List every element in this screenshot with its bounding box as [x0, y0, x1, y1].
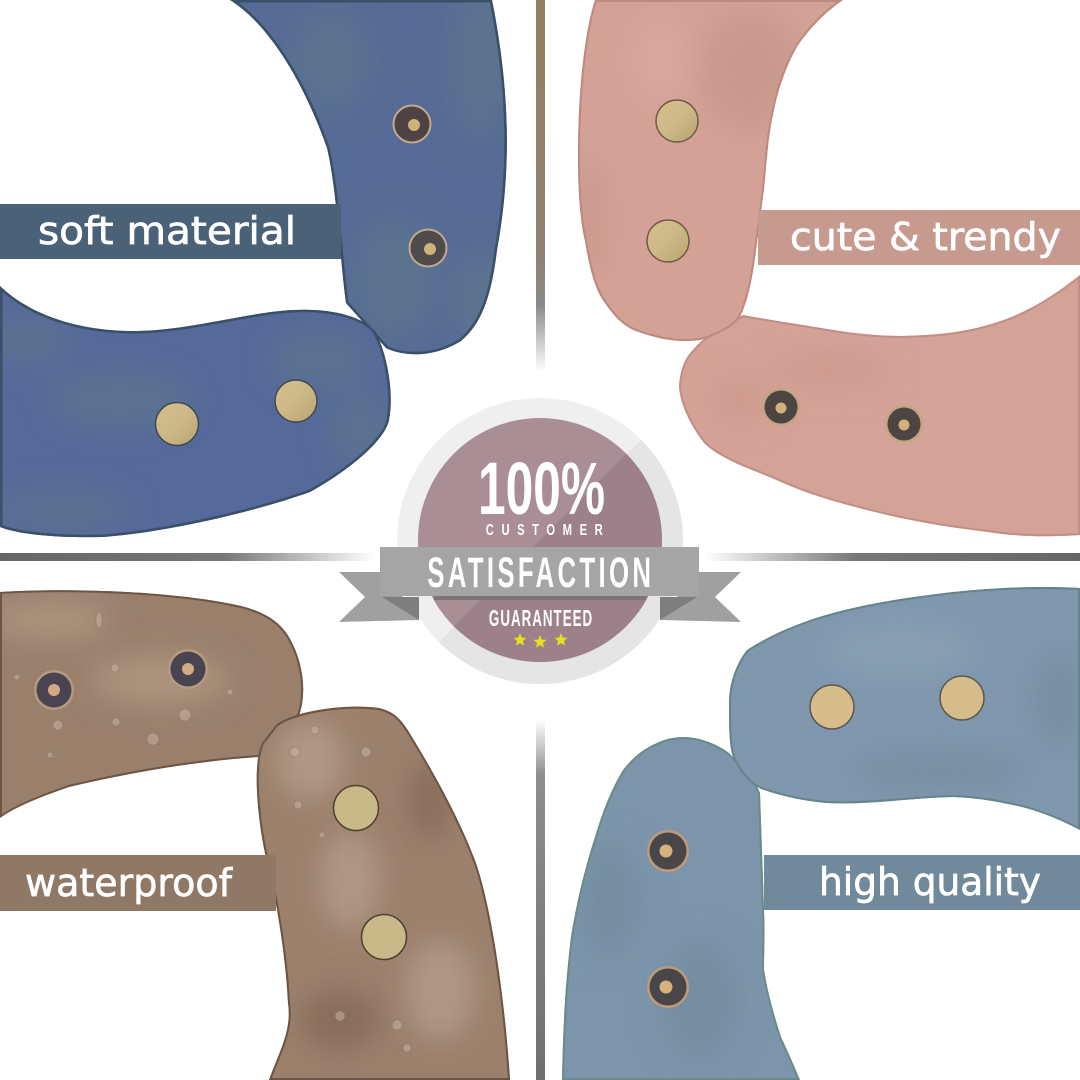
- snap: socket: [392, 104, 432, 144]
- text: satisfaction: SATISFACTION: [427, 548, 651, 597]
- label text: cute & trendy: [790, 215, 1061, 259]
- snap: socket: [762, 388, 800, 426]
- water droplets: [14, 612, 411, 1052]
- pink bib upper strap: [570, 0, 850, 345]
- badge: 100% customer satisfaction: [339, 398, 741, 684]
- pink bib lower strap: [675, 270, 1080, 540]
- snap: brass: [275, 380, 317, 422]
- steel bib upper strap: [725, 580, 1080, 835]
- panel: soft material: [0, 0, 520, 540]
- snap: socket: [168, 649, 208, 689]
- text: guaranteed: GUARANTEED: [489, 605, 592, 631]
- badge inner disc: [418, 418, 662, 662]
- brown bib right strap: [250, 700, 515, 1080]
- text: 100%: 100%: [478, 447, 605, 530]
- panel: high quality: [555, 580, 1080, 1080]
- snap: socket: [885, 405, 923, 443]
- snap: brass: [156, 402, 198, 446]
- snap: socket: [647, 966, 689, 1008]
- text: customer: CUSTOMER: [486, 520, 603, 538]
- label band: waterproof: [0, 855, 276, 911]
- label band: high quality: [764, 855, 1080, 910]
- panel: waterproof: [0, 585, 515, 1080]
- snap: brass: [940, 676, 984, 720]
- label band: cute and trendy: [758, 210, 1080, 265]
- snap: brass: [647, 220, 689, 262]
- label text: waterproof: [25, 861, 234, 905]
- badge outer ring: [397, 398, 683, 684]
- label text: soft material: [38, 209, 296, 253]
- ribbon band: [380, 547, 699, 596]
- snap: socket: [647, 830, 689, 872]
- brown bib left strap: [0, 585, 310, 830]
- snap: brass: [362, 914, 406, 960]
- label text: high quality: [819, 860, 1041, 904]
- steel bib lower strap: [555, 730, 805, 1080]
- snap: brass: [656, 100, 698, 142]
- panel: cute and trendy: [570, 0, 1080, 540]
- stars: [514, 633, 568, 648]
- label band: soft material: [0, 204, 341, 259]
- snap: brass: [334, 786, 378, 830]
- snap: socket: [408, 228, 448, 268]
- snap: socket: [34, 670, 74, 710]
- snap: brass: [810, 685, 854, 729]
- ribbon tails: [339, 572, 741, 622]
- blue bib lower strap: [0, 280, 400, 540]
- blue bib upper strap: [230, 0, 507, 354]
